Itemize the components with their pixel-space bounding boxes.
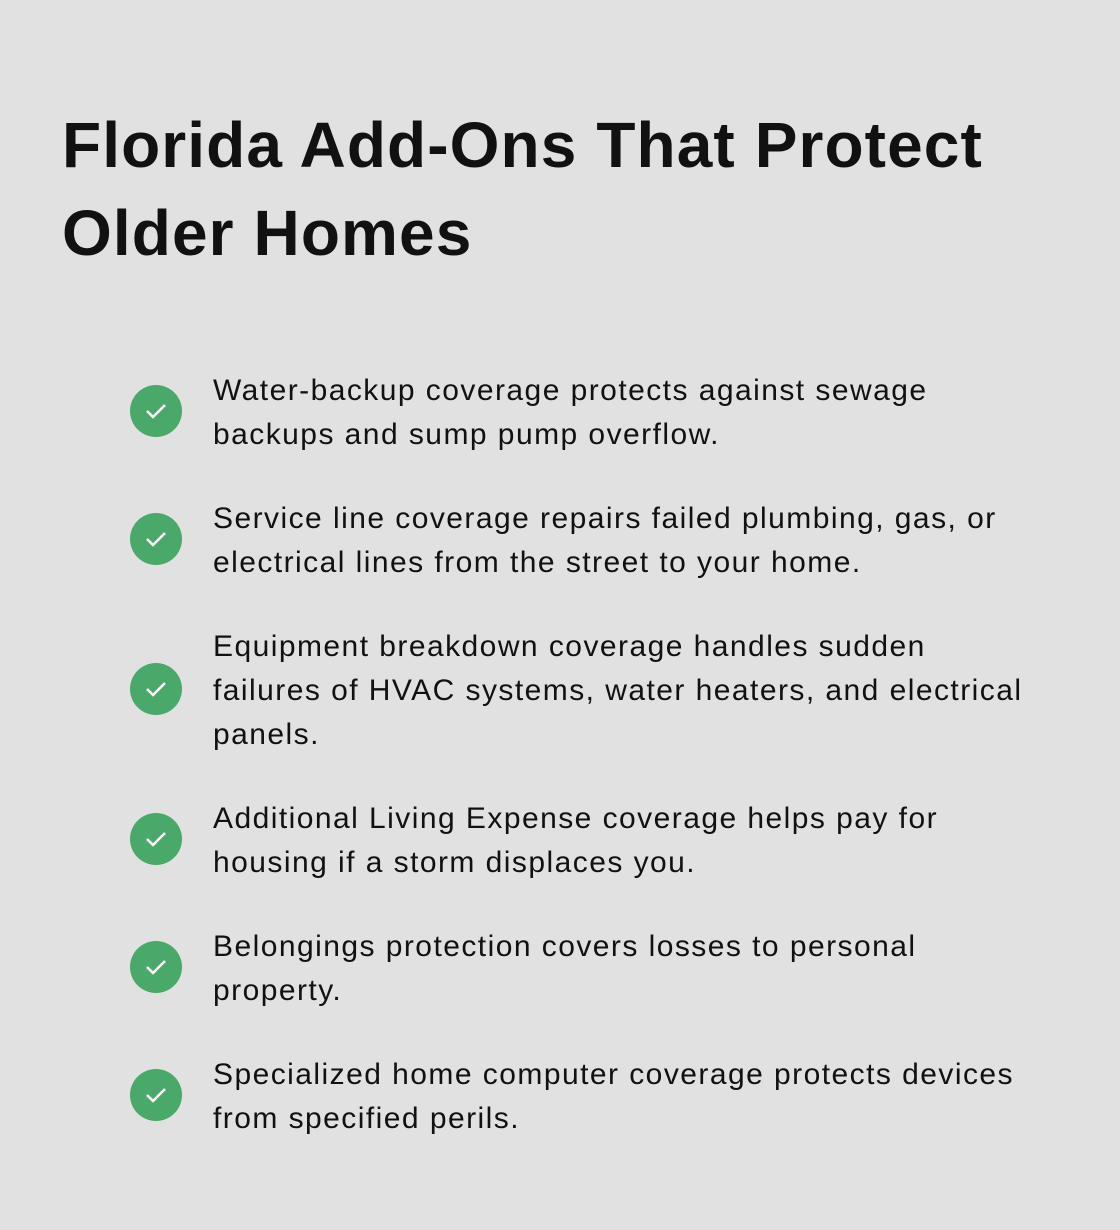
text [213, 502, 997, 579]
item 2 [130, 502, 997, 579]
icon: check [130, 385, 182, 437]
title: Florida Add-Ons That Protect [62, 109, 983, 181]
text: electrical lines from the street to your home. [213, 546, 862, 579]
item 6 [130, 1058, 1014, 1135]
icon: check [130, 1069, 182, 1121]
text: from specified perils. [213, 1102, 520, 1135]
text [213, 630, 1022, 751]
icon: check [130, 663, 182, 715]
text: Equipment breakdown coverage handles sudden [213, 630, 926, 663]
item 5 [130, 930, 917, 1007]
text: panels. [213, 718, 320, 751]
text: Additional Living Expense coverage helps pay for [213, 802, 938, 835]
text: backups and sump pump overflow. [213, 418, 720, 451]
item 3 [130, 630, 1022, 751]
text: property. [213, 974, 342, 1007]
text: failures of HVAC systems, water heaters, and electrical [213, 674, 1022, 707]
title: Older Homes [62, 197, 472, 269]
icon: check [130, 513, 182, 565]
text [213, 1058, 1014, 1135]
text [213, 802, 938, 879]
title [62, 109, 983, 269]
text [213, 930, 917, 1007]
text: Belongings protection covers losses to personal [213, 930, 917, 963]
item 1 [130, 374, 927, 451]
text: Service line coverage repairs failed plumbing, gas, or [213, 502, 997, 535]
icon: check [130, 813, 182, 865]
text [213, 374, 927, 451]
icon: check [130, 941, 182, 993]
text: housing if a storm displaces you. [213, 846, 696, 879]
text: Specialized home computer coverage protects devices [213, 1058, 1014, 1091]
item 4 [130, 802, 938, 879]
text: Water-backup coverage protects against sewage [213, 374, 927, 407]
